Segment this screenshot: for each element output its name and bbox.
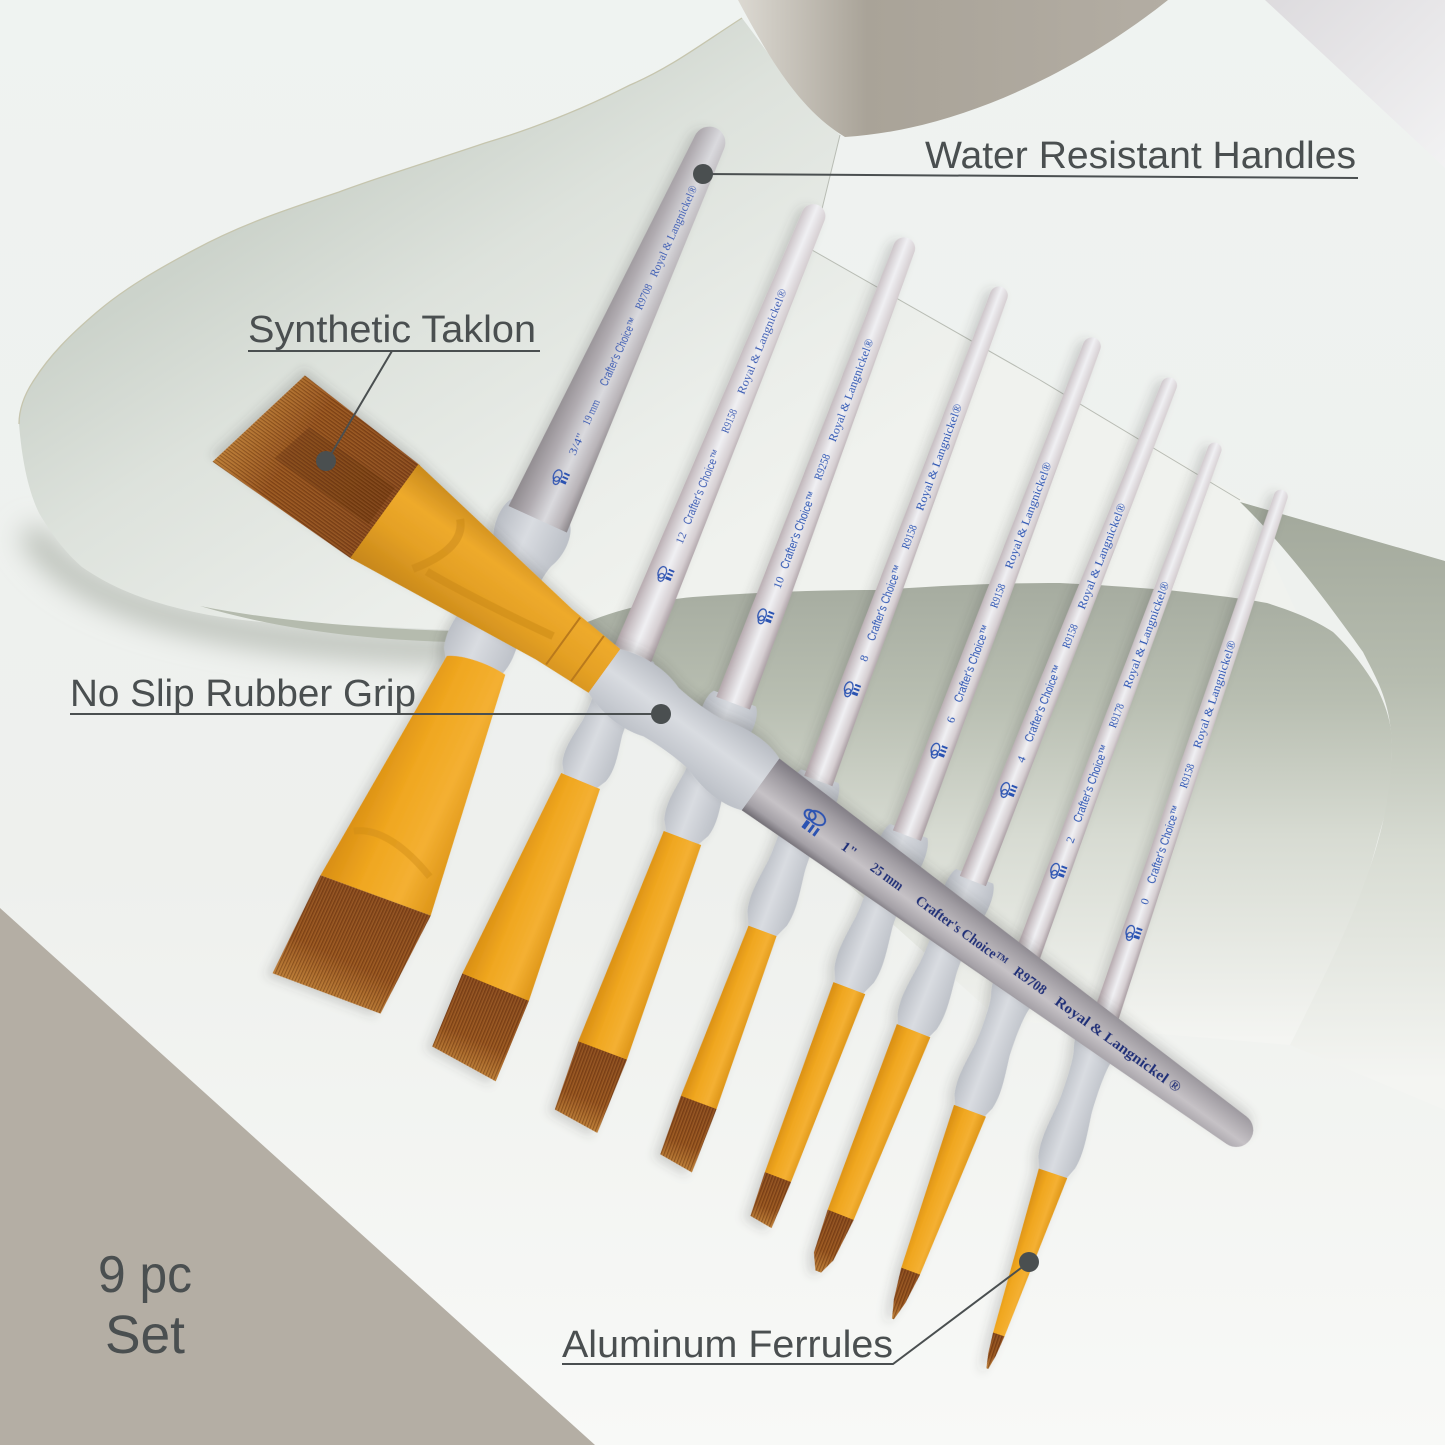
label: Aluminum Ferrules: Aluminum Ferrules bbox=[562, 1324, 893, 1366]
lettering: Royal & Langnickel® bbox=[1001, 460, 1055, 571]
lettering: Crafter's Choice™ bbox=[682, 448, 723, 527]
label: Aluminum Ferrules bbox=[562, 1252, 1039, 1366]
lettering bbox=[655, 286, 790, 585]
bristles bbox=[213, 361, 423, 562]
brush: size 6 bbox=[737, 329, 1118, 1233]
label: Synthetic Taklon: Synthetic Taklon bbox=[248, 309, 536, 351]
background: gray paper curl at top bbox=[738, 0, 1168, 137]
lettering: Royal & Langnickel® bbox=[1190, 638, 1239, 750]
handle bbox=[716, 232, 925, 710]
lettering bbox=[796, 805, 1187, 1097]
ferrule bbox=[321, 638, 535, 924]
label: No Slip Rubber Grip: No Slip Rubber Grip bbox=[70, 673, 416, 715]
lettering: Crafter's Choice™ bbox=[1023, 663, 1065, 744]
lettering: Crafter's Choice™ bbox=[1072, 743, 1112, 824]
label: Synthetic Taklon bbox=[248, 309, 540, 471]
lettering bbox=[928, 460, 1055, 761]
ferrule bbox=[578, 829, 707, 1060]
ferrule fold bbox=[413, 514, 577, 659]
brush: 3/4 inch flat bbox=[273, 106, 777, 1023]
brush: size 0 bbox=[966, 483, 1304, 1376]
lettering: 2 bbox=[1063, 834, 1078, 845]
text: 9 pc Set bbox=[98, 1246, 192, 1365]
lettering: Crafter's Choice™ bbox=[1146, 804, 1183, 886]
lettering: R9158 bbox=[718, 407, 740, 435]
lettering: 4 bbox=[1013, 754, 1029, 765]
rubber grip bbox=[583, 641, 782, 814]
brush: 1 inch flat foreground bbox=[213, 361, 1287, 1189]
handle bbox=[509, 115, 745, 533]
lettering: Royal & Langnickel® bbox=[734, 286, 790, 396]
ferrule bbox=[681, 924, 780, 1109]
lettering: 1" bbox=[838, 839, 860, 861]
background: top right corner bbox=[1265, 0, 1445, 168]
handle bbox=[804, 282, 1016, 786]
ferrule rings bbox=[546, 618, 604, 682]
lettering: 8 bbox=[856, 653, 872, 663]
background: gray surface bottom left bbox=[0, 908, 595, 1445]
ferrule bbox=[350, 464, 638, 718]
lettering: 6 bbox=[943, 714, 958, 725]
handle bbox=[1011, 438, 1229, 973]
ferrule bbox=[762, 982, 865, 1183]
lettering: R9158 bbox=[1176, 762, 1197, 790]
handle bbox=[742, 759, 1269, 1166]
lettering: R9178 bbox=[1105, 701, 1127, 730]
brush: size 10 bbox=[549, 228, 934, 1134]
lettering: R9708 bbox=[632, 281, 656, 312]
handle bbox=[613, 197, 836, 666]
label: Water Resistant Handles: Water Resistant Handles bbox=[925, 135, 1356, 177]
lettering: Crafter's Choice™ bbox=[779, 490, 819, 571]
bristles bbox=[657, 1096, 717, 1173]
lettering: Crafter's Choice™ bbox=[866, 564, 905, 643]
label: Water Resistant Handles bbox=[693, 135, 1358, 184]
lettering: Royal & Langnickel® bbox=[647, 183, 700, 279]
bristles bbox=[273, 866, 431, 1023]
ferrule bbox=[895, 1105, 986, 1277]
label: No Slip Rubber Grip bbox=[70, 673, 671, 724]
lettering: R9158 bbox=[987, 582, 1009, 610]
lettering bbox=[842, 401, 965, 700]
bristles bbox=[747, 1172, 791, 1229]
lettering bbox=[1124, 638, 1239, 943]
lettering bbox=[998, 501, 1129, 801]
bristles bbox=[884, 1268, 920, 1322]
lettering: 3/4" bbox=[565, 431, 588, 457]
lettering: Royal & Langnickel® bbox=[1074, 501, 1129, 611]
brush: size 4 bbox=[795, 369, 1195, 1281]
lettering: R9158 bbox=[1059, 622, 1081, 650]
ferrule fold bbox=[350, 824, 437, 877]
ferrule bbox=[462, 767, 614, 1001]
ferrule bbox=[985, 1169, 1067, 1339]
lettering: Royal & Langnickel® bbox=[1120, 579, 1172, 690]
lettering: Crafter's Choice™ bbox=[953, 623, 993, 704]
text: 9 pc Set: 9 pc bbox=[98, 1246, 192, 1304]
lettering: Royal & Langnickel® bbox=[912, 402, 965, 513]
lettering: Royal & Langnickel® bbox=[825, 337, 877, 444]
lettering: Crafter's Choice™ bbox=[599, 316, 640, 388]
handle bbox=[1092, 486, 1295, 1025]
lettering: R9158 bbox=[898, 523, 920, 551]
lettering: Royal & Langnickel ® bbox=[1051, 994, 1184, 1096]
lettering bbox=[550, 183, 700, 488]
lettering: 19 mm bbox=[579, 397, 603, 427]
background: green-gray shaded middle bbox=[580, 583, 1392, 1045]
brush: size 12 bbox=[429, 191, 851, 1081]
lettering: 25 mm bbox=[867, 860, 907, 895]
lettering: 12 bbox=[672, 530, 690, 546]
lettering: R9708 bbox=[1010, 964, 1049, 999]
handle bbox=[960, 373, 1185, 886]
brush: size 8 bbox=[652, 278, 1025, 1175]
bristles bbox=[429, 973, 529, 1081]
handle bbox=[893, 333, 1109, 841]
lettering: 0 bbox=[1137, 896, 1152, 906]
background: green-gray right side bbox=[1240, 502, 1445, 1110]
bristles bbox=[805, 1210, 854, 1277]
lettering: 10 bbox=[770, 574, 787, 591]
ferrule bbox=[824, 1024, 930, 1221]
background: shadow under ribbon bbox=[30, 530, 470, 650]
lettering bbox=[1048, 579, 1172, 882]
lettering: Crafter's Choice™ bbox=[912, 893, 1011, 970]
background: curled paper ribbon bbox=[19, 18, 1300, 630]
lettering: R9258 bbox=[811, 452, 833, 482]
bristles bbox=[982, 1333, 1004, 1370]
lettering bbox=[755, 336, 877, 627]
text: 9 pc Set: Set bbox=[105, 1305, 185, 1365]
brush: size 2 bbox=[871, 435, 1239, 1327]
bristles bbox=[550, 1041, 627, 1134]
